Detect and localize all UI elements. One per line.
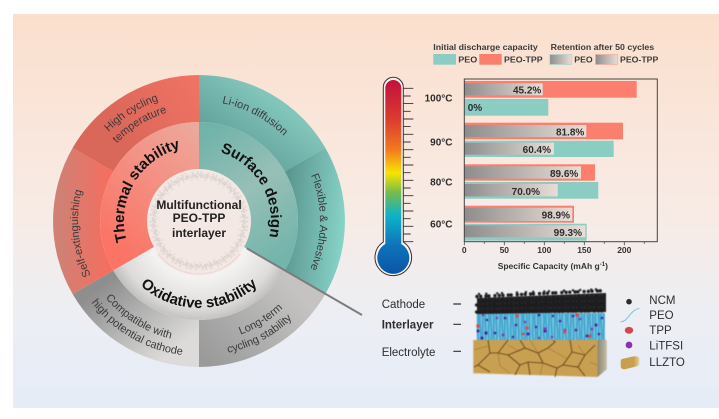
icon: NCM particle bbox=[626, 299, 632, 305]
center hub: Multifunctional PEO-TPP interlayer: Multifunctional bbox=[156, 198, 242, 212]
bars: 90 C bbox=[464, 123, 623, 157]
layer labels: Cathode bbox=[382, 299, 425, 311]
x axis labels: 200 bbox=[617, 245, 632, 255]
segment: Long-term cycling stability: Long-term bbox=[238, 305, 282, 334]
legend: materials: TPP bbox=[649, 325, 672, 337]
bars: 90 C: 60.4% bbox=[523, 145, 551, 156]
electrolyte block: LLZTO bbox=[473, 340, 607, 377]
legend: capacity and retention bbox=[433, 42, 659, 65]
icon: LiTFSI particle bbox=[626, 342, 632, 348]
bars: 90 C: 81.8% bbox=[556, 128, 584, 138]
segment: High cycling temperature: High cycling bbox=[104, 96, 158, 132]
bar chart: specific capacity by temperature bbox=[425, 79, 657, 271]
ring segment: Oxidative stability bbox=[114, 247, 284, 320]
layer labels: Interlayer bbox=[382, 319, 434, 331]
ring segment: Oxidative stability: Oxidative stability bbox=[142, 279, 256, 308]
segment: Flexible and Adhesive bbox=[284, 148, 345, 293]
cathode: NCM particles bbox=[476, 289, 607, 314]
legend: materials: LLZTO bbox=[649, 357, 685, 369]
layer labels bbox=[382, 299, 461, 359]
center hub: Multifunctional PEO-TPP interlayer: interlayer bbox=[172, 226, 226, 240]
segment: Self-extinguishing bbox=[53, 148, 114, 294]
segment: Self-extinguishing: Self-extinguishing bbox=[70, 190, 90, 277]
bars: 80 C bbox=[464, 164, 598, 199]
legend: materials bbox=[621, 295, 685, 369]
x axis title: -1 bbox=[600, 262, 606, 268]
ring segment: Thermal stability: Thermal stability bbox=[114, 140, 178, 244]
y axis labels: temperatures bbox=[425, 93, 452, 231]
x axis title: ) bbox=[605, 261, 608, 271]
bars: 100 C: 45.2% bbox=[513, 86, 541, 96]
segment: Li-ion diffusion bbox=[199, 75, 326, 172]
y axis labels: temperatures: 60°C bbox=[430, 220, 452, 231]
bars: 100 C: 0% bbox=[468, 103, 482, 114]
segment: Long-term cycling stability bbox=[199, 272, 325, 367]
layer labels: Electrolyte bbox=[382, 347, 435, 359]
center hub: Multifunctional PEO-TPP interlayer bbox=[147, 169, 251, 274]
icon: TPP particle bbox=[625, 327, 633, 334]
x axis labels: 100 bbox=[537, 245, 552, 255]
interlayer: PEO fibers with TPP and LiTFSI bbox=[476, 313, 605, 340]
segment: Long-term cycling stability: cycling stability bbox=[228, 314, 291, 354]
segment: High cycling temperature bbox=[72, 75, 199, 172]
x axis labels: 50 bbox=[500, 245, 509, 255]
segment: Compatible with high potential cathode: Compatible with bbox=[107, 294, 172, 338]
x axis labels: 0 bbox=[462, 245, 467, 255]
bars: 60 C: 99.3% bbox=[554, 228, 582, 239]
legend: capacity and retention: PEO bbox=[458, 55, 478, 65]
x axis labels bbox=[462, 245, 632, 255]
icon: PEO strand bbox=[621, 308, 639, 322]
legend: materials: PEO bbox=[649, 310, 674, 322]
legend: capacity and retention: PEO bbox=[574, 55, 593, 65]
bars: 100 C bbox=[464, 81, 637, 116]
bars: 80 C: 70.0% bbox=[512, 187, 540, 198]
x axis labels: 150 bbox=[577, 245, 592, 255]
segment: Flexible and Adhesive: Flexible & Adhesive bbox=[311, 173, 328, 270]
bars: 60 C: 98.9% bbox=[542, 210, 570, 222]
thermometer icon bbox=[375, 77, 413, 276]
legend: capacity and retention: PEO-TPP bbox=[620, 55, 659, 65]
layer stack illustration bbox=[473, 289, 607, 377]
y axis labels: temperatures: 90°C bbox=[430, 137, 452, 148]
legend: materials: NCM bbox=[649, 295, 676, 307]
ring segment: Surface design bbox=[199, 122, 298, 270]
legend: capacity and retention: PEO-TPP bbox=[504, 55, 543, 65]
panel: circular diagram bbox=[53, 75, 345, 367]
segment: High cycling temperature: temperature bbox=[112, 108, 166, 142]
segment: Li-ion diffusion: Li-ion diffusion bbox=[222, 96, 287, 136]
y axis labels: temperatures: 100°C bbox=[425, 93, 452, 104]
ring segment: Surface design: Surface design bbox=[222, 144, 282, 237]
center hub: Multifunctional PEO-TPP interlayer: PEO-TPP bbox=[173, 211, 225, 225]
x axis title: Specific Capacity (mAh g bbox=[498, 261, 600, 271]
legend: materials: LiTFSI bbox=[649, 340, 683, 352]
bars: 60 C bbox=[464, 206, 587, 241]
segment: Compatible with high potential cathode bbox=[72, 270, 199, 367]
y axis labels: temperatures: 80°C bbox=[430, 177, 452, 188]
segment: Compatible with high potential cathode: high potential cathode bbox=[92, 298, 182, 355]
ring segment: Thermal stability bbox=[100, 122, 199, 270]
legend: capacity and retention: Initial discharge capacity bbox=[433, 42, 538, 52]
bars: 80 C: 89.6% bbox=[550, 169, 578, 180]
connector line from hub to layer stack bbox=[247, 248, 362, 315]
legend: capacity and retention: Retention after 50 cycles bbox=[551, 42, 654, 52]
icon: LLZTO grain bbox=[621, 356, 639, 369]
